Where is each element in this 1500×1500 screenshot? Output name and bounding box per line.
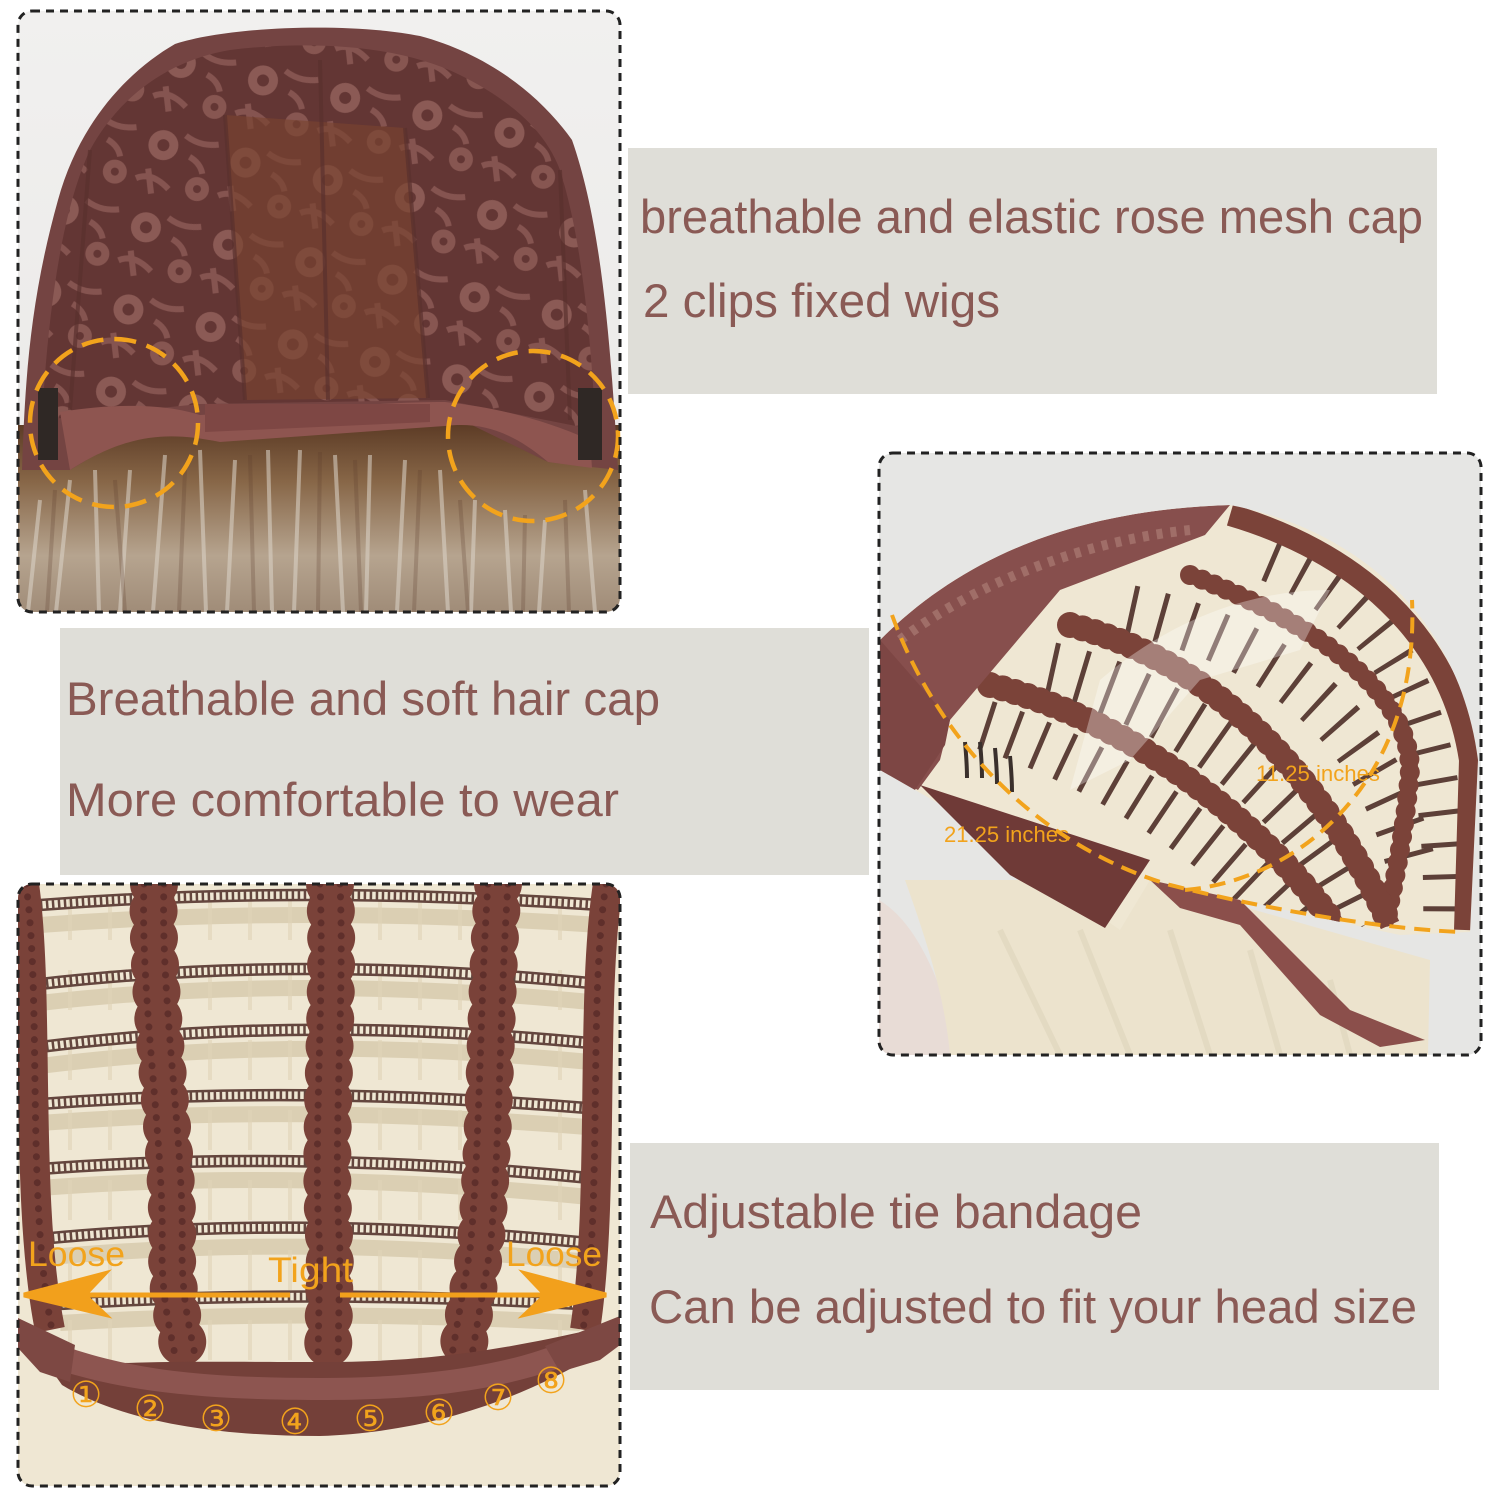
numbered adjustment marks: ② <box>134 1388 166 1429</box>
orange dashed circle right <box>448 351 618 521</box>
arrow: right <box>340 1274 606 1314</box>
cap interior <box>880 505 1478 935</box>
text box: breathable rose mesh cap <box>628 148 1437 394</box>
label: Loose left: Loose <box>28 1235 125 1274</box>
blond hair <box>905 880 1430 1055</box>
cap front band <box>60 402 592 470</box>
arrow: left <box>24 1274 290 1314</box>
text box: breathable soft hair cap <box>60 628 869 875</box>
numbered adjustment marks: ⑧ <box>535 1360 567 1401</box>
wig clips <box>38 388 58 460</box>
orange dashed measurement curves <box>892 615 1462 932</box>
strap loops <box>18 1318 75 1382</box>
elastic cross threads <box>40 890 600 1309</box>
hair shadows under threads <box>40 915 600 1323</box>
hair below the cap <box>18 425 620 612</box>
adjustable strap <box>1150 880 1425 1047</box>
text box: adjustable tie bandage <box>630 1143 1439 1390</box>
strap band with numbered holes <box>50 1330 600 1436</box>
numbered adjustment marks: ③ <box>200 1398 232 1439</box>
numbered adjustment marks: ⑥ <box>423 1392 455 1433</box>
label: 11.25 inches: 11.25 inches <box>1256 761 1380 786</box>
cap seams <box>70 60 570 420</box>
text box: breathable soft hair cap: Breathable and soft hair cap <box>66 672 660 725</box>
elastic cross threads <box>985 560 1445 930</box>
transparent highlight on cap <box>1070 590 1330 790</box>
vertical lace ribs <box>24 884 608 1358</box>
hair strands <box>70 900 560 1360</box>
panel: inside of cap with adjustable strap <box>18 884 620 1486</box>
panel: rose mesh cap photo <box>18 11 620 612</box>
label: Tight: Tight <box>268 1251 353 1290</box>
numbered adjustment marks: ⑦ <box>482 1377 514 1418</box>
text box: adjustable tie bandage: Can be adjusted to fit your head size <box>649 1280 1417 1333</box>
cap ribs <box>990 515 1470 930</box>
mesh cap body <box>22 28 618 470</box>
panel: side view of cap with measurements <box>879 453 1481 1055</box>
numbered adjustment marks: ④ <box>279 1401 311 1442</box>
text box: breathable rose mesh cap: 2 clips fixed wigs <box>643 274 1000 327</box>
text box: adjustable tie bandage: Adjustable tie bandage <box>650 1185 1142 1238</box>
center lace panel <box>225 115 428 400</box>
label: 21.25 inches: 21.25 inches <box>944 822 1069 847</box>
skin tone left <box>879 900 950 1055</box>
orange dashed circle left <box>30 339 198 507</box>
text box: breathable soft hair cap: More comfortable to wear <box>66 773 619 826</box>
numbered adjustment marks <box>70 1360 567 1442</box>
numbered adjustment marks: ① <box>70 1374 102 1415</box>
ear flap with clip <box>920 785 1150 928</box>
text box: breathable rose mesh cap: breathable and elastic rose mesh cap <box>640 190 1423 243</box>
dark lace crown <box>880 505 1230 790</box>
numbered adjustment marks: ⑤ <box>354 1398 386 1439</box>
label: Loose right: Loose <box>506 1235 602 1274</box>
